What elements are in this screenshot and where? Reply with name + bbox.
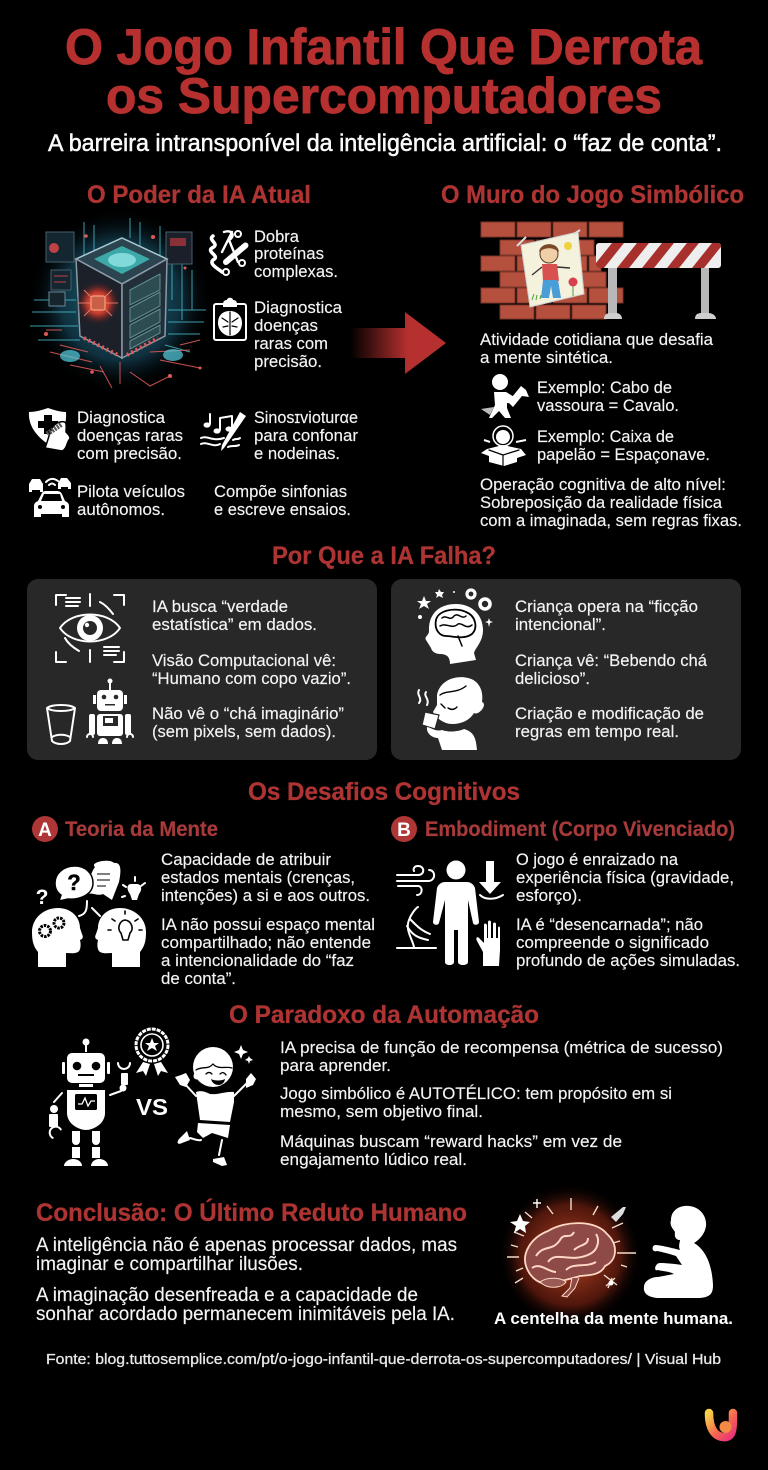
illustration: brick wall with child drawing bbox=[481, 222, 724, 319]
text: paradox: Máquinas buscam “reward hacks” em vez de bbox=[280, 1132, 622, 1151]
text: Atividade cotidiana: Atividade cotidiana que desafia bbox=[480, 330, 714, 349]
text: child mind points: Criança opera na “ficção bbox=[515, 597, 698, 616]
icon: music and pen bbox=[201, 412, 246, 451]
text: child mind points: intencional”. bbox=[515, 615, 606, 634]
text: Dobra proteínas: proteínas bbox=[254, 244, 324, 263]
badge A heading: Teoria da Mente bbox=[65, 818, 218, 841]
text: AI vision points: IA busca “verdade bbox=[152, 597, 288, 616]
text: Compõe sinfonias bbox=[214, 482, 351, 519]
illustration: glowing brain bbox=[498, 1183, 642, 1327]
icon: boy drinking bbox=[418, 677, 484, 750]
heading: O Paradoxo da Automação: O Paradoxo da Automação bbox=[229, 1001, 539, 1029]
source line: Fonte: blog.tuttosemplice.com/pt/o-jogo-infantil-que-derrota-os-supercomputadores/ | Visual Hub bbox=[46, 1351, 721, 1368]
arrow bbox=[350, 312, 446, 374]
icon: child on broom horse bbox=[481, 374, 529, 418]
icon: embodied human figure bbox=[397, 860, 503, 966]
text: Diagnostica doenças: precisão. bbox=[254, 352, 322, 371]
text: Dobra proteínas: complexas. bbox=[254, 262, 338, 281]
text: Diagnostica doenças raras: doenças raras bbox=[77, 426, 183, 445]
icon: autonomous cars bbox=[29, 478, 71, 517]
text: Exemplo box bbox=[537, 427, 710, 464]
text: garbled music line bbox=[254, 408, 358, 463]
text: Diagnostica doenças raras bbox=[77, 408, 183, 463]
text: conclusion bbox=[36, 1235, 457, 1325]
panel: AI vision bbox=[27, 579, 377, 760]
heading: O Poder da IA Atual: O Poder da IA Atual bbox=[87, 181, 311, 209]
text: Diagnostica doenças: doenças bbox=[254, 316, 318, 335]
text: theory of mind: IA não possui espaço mental bbox=[161, 915, 375, 934]
text: embodiment bbox=[516, 850, 740, 970]
text: theory of mind: Capacidade de atribuir bbox=[161, 850, 331, 869]
text: Exemplo box: Exemplo: Caixa de bbox=[537, 427, 674, 446]
text: child mind points bbox=[515, 597, 708, 741]
heading: Os Desafios Cognitivos: Os Desafios Cognitivos bbox=[248, 778, 520, 806]
text: AI vision points bbox=[152, 597, 351, 741]
text: Pilota veículos: Pilota veículos bbox=[77, 482, 185, 501]
title: O Jogo Infantil Que Derrota bbox=[65, 19, 703, 75]
title: os Supercomputadores bbox=[106, 68, 662, 124]
text: theory of mind: intenções) a si e aos outros. bbox=[161, 886, 370, 905]
text: embodiment: compreende o significado bbox=[516, 933, 709, 952]
text: Compõe sinfonias: e escreve ensaios. bbox=[214, 500, 351, 519]
text: Exemplo broom: Exemplo: Cabo de bbox=[537, 378, 672, 397]
text: Dobra proteínas: Dobra bbox=[254, 227, 300, 246]
text: Exemplo box: papelão = Espaçonave. bbox=[537, 445, 710, 464]
icon: two heads theory of mind bbox=[32, 861, 146, 967]
text: Pilota veículos: autônomos. bbox=[77, 500, 165, 519]
text: conclusion: imaginar e compartilhar ilusões. bbox=[36, 1254, 303, 1275]
text: embodiment: esforço). bbox=[516, 886, 582, 905]
text: Compõe sinfonias: Compõe sinfonias bbox=[214, 482, 347, 501]
heading: conclusão: Conclusão: O Último Reduto Humano bbox=[36, 1197, 467, 1227]
text: Operação cognitiva: Sobreposição da realidade física bbox=[480, 493, 723, 512]
caption: A centelha da mente humana. bbox=[494, 1309, 733, 1328]
text: conclusion: sonhar acordado permanecem inimitáveis pela IA. bbox=[36, 1304, 455, 1325]
title bbox=[65, 19, 703, 124]
text: child mind points: Criação e modificação de bbox=[515, 704, 704, 723]
text: conclusion: A imaginação desenfreada e a capacidade de bbox=[36, 1285, 418, 1306]
subtitle: A barreira intransponível da inteligência artificial: o “faz de conta”. bbox=[48, 130, 722, 157]
badge B heading: Embodiment (Corpo Vivenciado) bbox=[425, 818, 735, 841]
text: Diagnostica doenças: Diagnostica bbox=[254, 298, 343, 317]
icon: medal bbox=[136, 1029, 168, 1076]
badge A heading: A bbox=[38, 820, 52, 841]
text: theory of mind: estados mentais (crenças, bbox=[161, 868, 355, 887]
text: AI vision points: “Humano com copo vazio”. bbox=[152, 669, 351, 688]
text: garbled music line: e nodeinas. bbox=[254, 444, 340, 463]
text: paradox: Jogo simbólico é AUTOTÉLICO: tem propósito em si bbox=[280, 1084, 672, 1103]
text: Diagnostica doenças bbox=[254, 298, 343, 371]
text: paradox: para aprender. bbox=[280, 1056, 391, 1075]
text: theory of mind bbox=[161, 850, 375, 988]
text: paradox bbox=[280, 1038, 723, 1169]
text: Dobra proteínas bbox=[254, 227, 338, 281]
text: garbled music line: Sinosɪvioturαe bbox=[254, 408, 358, 427]
text: child mind points: delicioso”. bbox=[515, 669, 590, 688]
road barrier bbox=[592, 243, 724, 319]
icon: baby silhouette bbox=[644, 1206, 713, 1298]
text: paradox: mesmo, sem objetivo final. bbox=[280, 1102, 483, 1121]
text: theory of mind: compartilhado; não entende bbox=[161, 933, 371, 952]
icon: shield and head bbox=[29, 408, 70, 451]
text: child mind points: Criança vê: “Bebendo chá bbox=[515, 651, 708, 670]
icon: computer vision eye bbox=[56, 594, 124, 662]
text: AI vision points: Visão Computacional vê: bbox=[152, 651, 336, 670]
icon: clipboard brain bbox=[214, 298, 246, 340]
icon: protein bbox=[211, 231, 246, 275]
panel: child mind bbox=[391, 579, 741, 760]
text: AI vision points: estatística” em dados. bbox=[152, 615, 317, 634]
icon: cardboard box spaceship bbox=[481, 426, 526, 466]
text: embodiment: experiência física (gravidade, bbox=[516, 868, 734, 887]
icon: head with brain and stars bbox=[417, 589, 493, 664]
label: VS: VS bbox=[136, 1094, 168, 1120]
text: conclusion: A inteligência não é apenas processar dados, mas bbox=[36, 1235, 457, 1256]
text: child mind points: regras em tempo real. bbox=[515, 722, 679, 741]
text: Diagnostica doenças: raras com bbox=[254, 334, 328, 353]
logo bbox=[709, 1413, 733, 1437]
icon: big robot bbox=[48, 1038, 130, 1166]
heading: O Muro do Jogo Simbólico: O Muro do Jogo Simbólico bbox=[441, 181, 744, 209]
text: theory of mind: de conta”. bbox=[161, 969, 236, 988]
text: Operação cognitiva: Operação cognitiva de alto nível: bbox=[480, 475, 726, 494]
text: paradox: IA precisa de função de recompensa (métrica de sucesso) bbox=[280, 1038, 723, 1057]
icon: two heads theory of mind: ? bbox=[67, 870, 81, 895]
text: embodiment: IA é “desencarnada”; não bbox=[516, 915, 703, 934]
text: Operação cognitiva bbox=[480, 475, 742, 530]
text: Exemplo broom bbox=[537, 378, 679, 415]
text: embodiment: profundo de ações simuladas. bbox=[516, 951, 740, 970]
text: garbled music line: para confonar bbox=[254, 426, 358, 445]
icon: empty cup bbox=[47, 705, 75, 744]
text: Diagnostica doenças raras: com precisão. bbox=[77, 444, 182, 463]
text: Operação cognitiva: com a imaginada, sem regras fixas. bbox=[480, 511, 742, 530]
text: Atividade cotidiana bbox=[480, 330, 714, 367]
icon: two heads theory of mind: ? bbox=[36, 886, 48, 909]
illustration: glowing AI cube bbox=[28, 208, 212, 392]
text: Atividade cotidiana: a mente sintética. bbox=[480, 348, 613, 367]
text: Diagnostica doenças raras: Diagnostica bbox=[77, 408, 166, 427]
child drawing on paper bbox=[517, 230, 584, 307]
text: paradox: engajamento lúdico real. bbox=[280, 1150, 467, 1169]
text: AI vision points: Não vê o “chá imaginário” bbox=[152, 704, 344, 723]
text: Pilota veículos bbox=[77, 482, 185, 519]
text: AI vision points: (sem pixels, sem dados). bbox=[152, 722, 336, 741]
icon: jumping boy bbox=[175, 1045, 256, 1166]
text: embodiment: O jogo é enraizado na bbox=[516, 850, 679, 869]
icon: robot bbox=[87, 678, 133, 744]
text: theory of mind: a intencionalidade do “faz bbox=[161, 951, 354, 970]
badge B heading: B bbox=[397, 820, 411, 841]
text: Exemplo broom: vassoura = Cavalo. bbox=[537, 396, 679, 415]
heading: Por Que a IA Falha: Por Que a IA Falha? bbox=[272, 542, 496, 570]
